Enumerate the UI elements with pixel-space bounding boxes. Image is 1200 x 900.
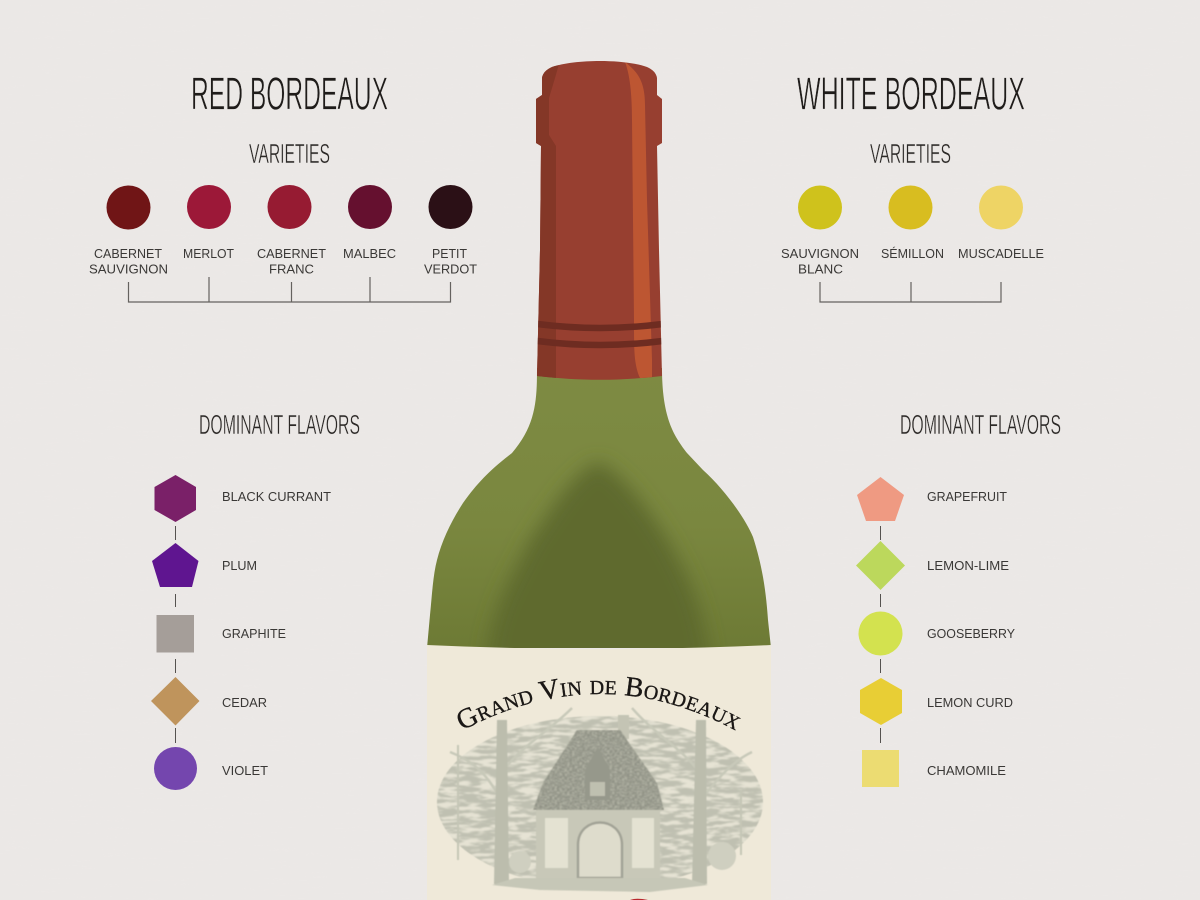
variety swatches: [106, 185, 472, 230]
variety names: BLANC: [798, 262, 843, 276]
capsule: [536, 61, 662, 380]
flavor names: [222, 490, 331, 778]
engraving: chateau and trees: [436, 707, 764, 892]
flavor names: GRAPEFRUIT: [927, 490, 1007, 504]
heading: varieties: VARIETIES: [870, 138, 951, 169]
flavor names: CEDAR: [222, 696, 267, 710]
variety names: [781, 246, 1044, 276]
bracket: [128, 277, 450, 302]
wine label: [427, 645, 771, 900]
bracket: [820, 282, 1001, 302]
wine bottle: [380, 61, 804, 900]
variety names: PETIT: [432, 247, 467, 261]
flavor names: LEMON-LIME: [927, 559, 1009, 573]
title: RED BORDEAUX: [191, 68, 388, 120]
flavor names: BLACK CURRANT: [222, 490, 331, 504]
label heading: Grand Vin de Bordeaux: [458, 676, 741, 730]
flavor connectors: [880, 526, 882, 743]
flavor connectors: [174, 526, 176, 743]
capsule bands: [530, 323, 670, 345]
capsule left shadow: [536, 65, 558, 378]
flavor icons: [856, 477, 905, 787]
bottle glass: [427, 368, 771, 648]
flavor icons: [151, 475, 200, 790]
flavor names: CHAMOMILE: [927, 764, 1006, 778]
variety names: MUSCADELLE: [958, 247, 1044, 261]
flavor names: LEMON CURD: [927, 696, 1013, 710]
variety names: SÉMILLON: [881, 246, 944, 261]
flavor names: [927, 490, 1016, 778]
variety names: MALBEC: [343, 247, 396, 261]
variety names: CABERNET: [94, 247, 162, 261]
variety names: MERLOT: [183, 247, 234, 261]
capsule highlight: [625, 62, 652, 378]
heading: varieties: VARIETIES: [249, 138, 330, 169]
flavor names: GOOSEBERRY: [927, 627, 1016, 641]
variety names: FRANC: [269, 262, 314, 276]
flavor names: VIOLET: [222, 764, 268, 778]
variety names: CABERNET: [257, 247, 326, 261]
variety names: SAUVIGNON: [781, 247, 859, 261]
heading: dominant flavors: DOMINANT FLAVORS: [199, 409, 360, 440]
variety names: VERDOT: [424, 262, 477, 276]
variety names: [89, 247, 477, 276]
panel: red bordeaux: [89, 68, 477, 790]
variety swatches: [798, 186, 1023, 230]
variety names: SAUVIGNON: [89, 262, 168, 276]
panel: white bordeaux: [781, 68, 1061, 787]
flavor names: GRAPHITE: [222, 627, 286, 641]
flavor names: PLUM: [222, 559, 257, 573]
heading: dominant flavors: DOMINANT FLAVORS: [900, 409, 1061, 440]
